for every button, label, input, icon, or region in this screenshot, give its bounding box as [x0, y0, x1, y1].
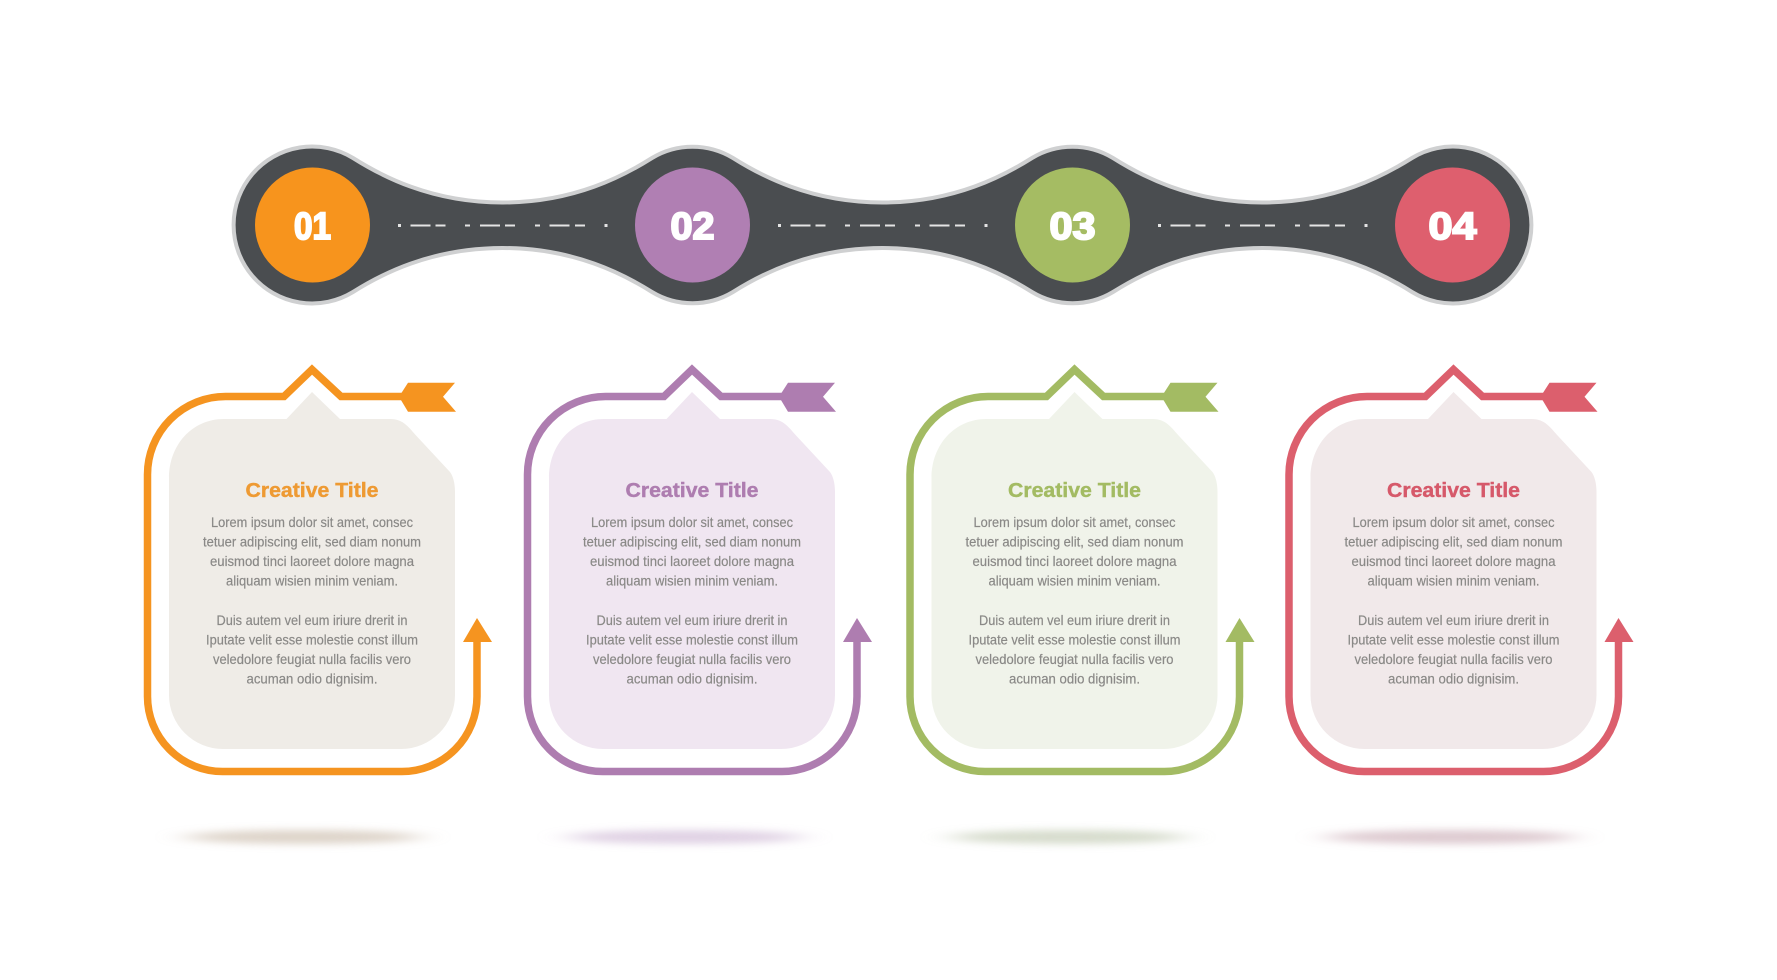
body text: tetuer adipiscing elit, sed diam nonum [1344, 534, 1562, 550]
step badge 03 [1015, 168, 1130, 282]
body text: acuman odio dignisim. [626, 670, 758, 686]
arrow tail flag [1162, 383, 1218, 412]
panel background [932, 392, 1218, 749]
outline arrow [148, 370, 492, 772]
body text: Iputate velit esse molestie const illum [206, 632, 418, 648]
arrow head [1226, 618, 1254, 642]
body text [966, 514, 1184, 686]
arrow head [843, 618, 872, 642]
road timeline [234, 146, 1531, 304]
outline arrow [910, 370, 1254, 772]
body text: acuman odio dignisim. [246, 670, 378, 686]
step badge 03: 03 [1050, 206, 1096, 248]
shadow under card 1 [185, 830, 421, 844]
panel background [169, 392, 455, 749]
body text: Lorem ipsum dolor sit amet, consec [211, 514, 413, 530]
body text: acuman odio dignisim. [1009, 670, 1140, 686]
road dashes 1 [398, 224, 608, 227]
step badge 04: 04 [1428, 206, 1476, 248]
step badge 02 [635, 168, 750, 282]
body text: Lorem ipsum dolor sit amet, consec [591, 514, 793, 530]
body text: acuman odio dignisim. [1388, 670, 1519, 686]
body text: euismod tinci laoreet dolore magna [1352, 553, 1556, 569]
body text: aliquam wisien minim veniam. [226, 572, 398, 588]
arrow head [463, 618, 492, 642]
body text: Iputate velit esse molestie const illum [586, 632, 798, 648]
card title: Creative Title [246, 480, 378, 502]
outline arrow [528, 370, 872, 772]
step badge 04 [1395, 168, 1510, 282]
road dashes 3 [1158, 224, 1368, 227]
body text: aliquam wisien minim veniam. [988, 572, 1160, 588]
body text: aliquam wisien minim veniam. [1368, 572, 1540, 588]
step badge 01 [255, 168, 370, 282]
body text: euismod tinci laoreet dolore magna [210, 553, 414, 569]
arrow tail flag [779, 383, 836, 412]
outline arrow [1289, 370, 1634, 772]
card title: Creative Title [1008, 480, 1141, 502]
body text: Iputate velit esse molestie const illum [968, 632, 1180, 648]
body text: tetuer adipiscing elit, sed diam nonum [583, 534, 801, 550]
body text: Iputate velit esse molestie const illum [1348, 632, 1560, 648]
body text: Duis autem vel eum iriure drerit in [216, 612, 408, 628]
road dashes 2 [778, 224, 988, 227]
panel: card 3 [910, 370, 1254, 772]
body text: tetuer adipiscing elit, sed diam nonum [966, 534, 1184, 550]
panel background [1310, 392, 1596, 749]
panel: card 2 [528, 370, 872, 772]
body text [1344, 514, 1562, 686]
body text: Duis autem vel eum iriure drerit in [1358, 612, 1549, 628]
shadow under card 3 [950, 830, 1186, 844]
body text: euismod tinci laoreet dolore magna [972, 553, 1177, 569]
body text: Duis autem vel eum iriure drerit in [979, 612, 1170, 628]
body text: aliquam wisien minim veniam. [606, 572, 778, 588]
body text: tetuer adipiscing elit, sed diam nonum [203, 534, 421, 550]
panel: card 1 [148, 370, 492, 772]
body text [203, 514, 421, 686]
body text: Duis autem vel eum iriure drerit in [596, 612, 788, 628]
step badge 01: 01 [294, 206, 331, 248]
body text: veledolore feugiat nulla facilis vero [976, 651, 1174, 667]
step badge 02: 02 [670, 206, 714, 248]
road shape [234, 146, 1531, 304]
arrow tail flag [1540, 383, 1598, 412]
arrow head [1604, 618, 1634, 642]
panel: card 4 [1289, 370, 1634, 772]
card title: Creative Title [626, 480, 758, 502]
arrow tail flag [399, 383, 456, 412]
body text: euismod tinci laoreet dolore magna [590, 553, 794, 569]
panel background [549, 392, 835, 749]
body text [583, 514, 801, 686]
body text: veledolore feugiat nulla facilis vero [213, 651, 411, 667]
body text: Lorem ipsum dolor sit amet, consec [1352, 514, 1554, 530]
shadow under card 4 [1325, 830, 1575, 844]
body text: Lorem ipsum dolor sit amet, consec [974, 514, 1176, 530]
body text: veledolore feugiat nulla facilis vero [1354, 651, 1553, 667]
card title: Creative Title [1387, 480, 1520, 502]
body text: veledolore feugiat nulla facilis vero [593, 651, 791, 667]
shadow under card 2 [567, 830, 803, 844]
